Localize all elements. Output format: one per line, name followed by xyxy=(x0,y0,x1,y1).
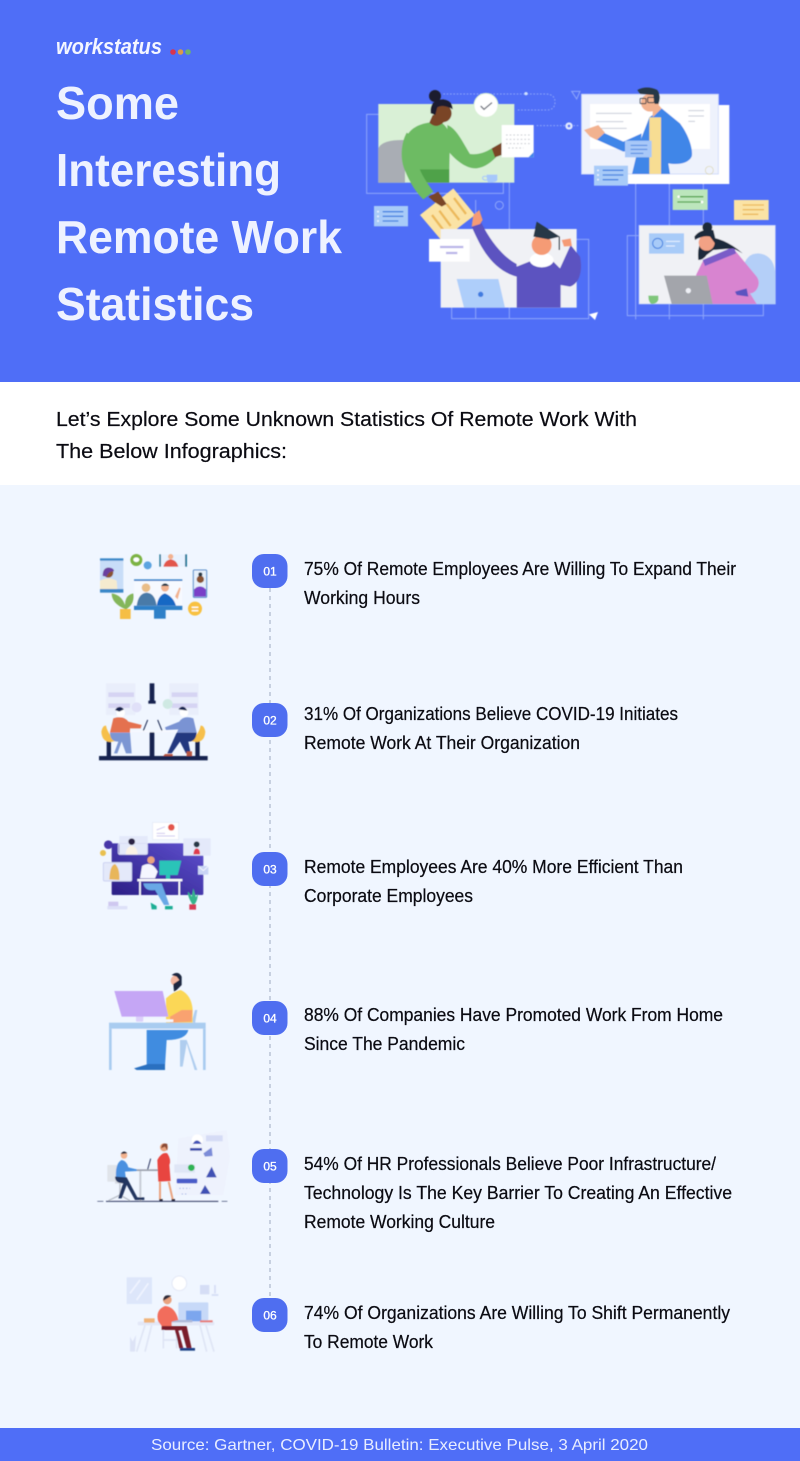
illustration: virtual meeting xyxy=(100,822,211,910)
footer: source xyxy=(0,1428,800,1461)
statistic text 05 xyxy=(304,1154,732,1232)
statistic text 02 xyxy=(304,704,678,753)
title: Interesting xyxy=(56,144,281,196)
icon: check badge xyxy=(474,93,498,117)
statistic text 06: To Remote Work xyxy=(304,1332,434,1352)
number badge 04 xyxy=(252,1001,288,1035)
statistic text 01 xyxy=(304,559,736,608)
number badge 06 xyxy=(252,1298,288,1332)
statistic text 04 xyxy=(304,1005,723,1054)
number badge 03: 03 xyxy=(263,862,277,876)
panel: woman with laptop xyxy=(639,222,775,304)
statistic text 05: Remote Working Culture xyxy=(304,1212,495,1232)
note card: yellow xyxy=(734,200,769,220)
icon: yellow document xyxy=(420,188,475,241)
number badge 06: 06 xyxy=(263,1308,277,1322)
illustration: HR professionals xyxy=(97,1130,230,1201)
statistic text 06: 74% Of Organizations Are Willing To Shift Permanently xyxy=(304,1303,730,1323)
item 02 xyxy=(99,683,678,760)
number badge 04: 04 xyxy=(263,1012,277,1026)
statistic text 01: Working Hours xyxy=(304,588,420,608)
number badge 02: 02 xyxy=(263,714,277,728)
panel: man presenting xyxy=(582,87,729,184)
intro text: The Below Infographics: xyxy=(56,441,287,463)
title: Some xyxy=(56,77,179,129)
illustration: man at desktop xyxy=(109,973,206,1070)
statistic text 04: Since The Pandemic xyxy=(304,1034,465,1054)
panel: graduate xyxy=(441,210,581,308)
statistic text 05: 54% Of HR Professionals Believe Poor Infrastructure/ xyxy=(304,1154,716,1174)
number badge 02 xyxy=(252,703,288,737)
number badge 05: 05 xyxy=(263,1160,277,1174)
number badge 01: 01 xyxy=(263,564,277,578)
intro text: Let’s Explore Some Unknown Statistics Of Remote Work With xyxy=(56,409,637,431)
intro text xyxy=(56,409,637,463)
icon: paper plane xyxy=(589,312,598,320)
statistic text 04: 88% Of Companies Have Promoted Work From Home xyxy=(304,1005,723,1025)
statistic text 01: 75% Of Remote Employees Are Willing To Expand Their xyxy=(304,559,736,579)
icon: calendar xyxy=(502,125,534,157)
illustration: home office xyxy=(127,1276,218,1352)
statistic text 03: Remote Employees Are 40% More Efficient Than xyxy=(304,857,683,877)
note card: white xyxy=(429,239,470,262)
item 06 xyxy=(127,1276,730,1352)
statistic text 03: Corporate Employees xyxy=(304,886,473,906)
number badge 05 xyxy=(252,1149,288,1183)
title: Statistics xyxy=(56,278,254,330)
timeline dashed line xyxy=(269,588,271,1298)
panel: woman in green xyxy=(378,90,514,199)
panel: intro band xyxy=(0,382,800,485)
statistic text 05: Technology Is The Key Barrier To Creating An Effective xyxy=(304,1183,732,1203)
item 01 xyxy=(100,554,736,619)
statistic text 03 xyxy=(304,857,683,906)
footer: source: Source: Gartner, COVID-19 Bulletin: Executive Pulse, 3 April 2020 xyxy=(151,1437,648,1454)
note card: green xyxy=(673,189,708,210)
logo: workstatus: workstatus xyxy=(56,34,162,59)
illustration: two colleagues at desk xyxy=(99,683,208,760)
statistic text 02: 31% Of Organizations Believe COVID-19 Initiates xyxy=(304,704,678,724)
statistic text 06 xyxy=(304,1303,730,1352)
panel: hero background xyxy=(0,0,800,382)
item 04 xyxy=(109,973,723,1070)
note card: left blue xyxy=(374,206,408,226)
statistic text 02: Remote Work At Their Organization xyxy=(304,733,580,753)
item 05 xyxy=(97,1130,732,1232)
title xyxy=(56,77,342,330)
number badge 03 xyxy=(252,852,288,886)
panel: statistics background xyxy=(0,485,800,1428)
note card: blue xyxy=(594,166,628,186)
item 03 xyxy=(100,822,683,910)
number badge 01 xyxy=(252,554,288,588)
title: Remote Work xyxy=(56,211,342,263)
illustration: video call xyxy=(100,554,207,619)
illustration: remote team video panels xyxy=(367,87,775,320)
